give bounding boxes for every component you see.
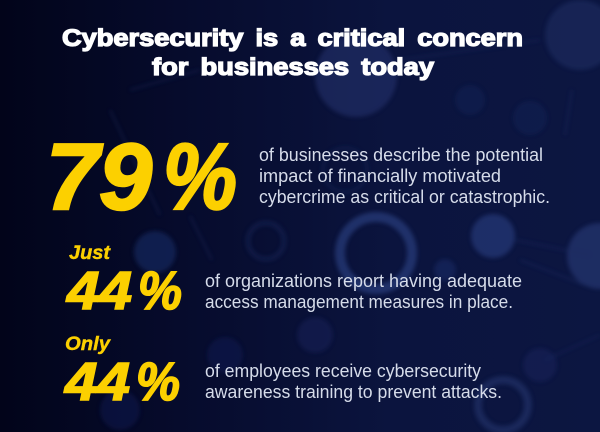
description: 79 percent: cybercrime as critical or catastrophic. [259, 187, 550, 207]
description: awareness training [205, 361, 502, 402]
title: Cybersecurity is a critical concern [62, 25, 523, 52]
big number 79%: 79 [46, 124, 152, 229]
big number 44%: 44 [64, 352, 130, 412]
stat: just 44 percent [66, 243, 522, 321]
description: access management [205, 271, 522, 312]
big number 79%: % [163, 124, 237, 229]
description: access management: of organizations report having adequate [205, 271, 522, 291]
label: Only: Only [65, 334, 112, 355]
title: for businesses today [152, 54, 435, 81]
title [62, 25, 523, 81]
big number 79% [46, 124, 237, 229]
description: access management: access management measures in place. [205, 292, 513, 312]
label: Just: Just [69, 243, 111, 264]
description: awareness training: awareness training to prevent attacks. [205, 382, 502, 402]
description: 79 percent [259, 145, 550, 207]
stat: only 44 percent [64, 334, 502, 412]
big number 44%: 44 [66, 261, 132, 321]
stat: 79 percent [46, 124, 550, 229]
description: 79 percent: impact of financially motivated [259, 166, 501, 186]
description: 79 percent: of businesses describe the potential [259, 145, 543, 165]
big number 44% [64, 352, 180, 412]
big number 44% [66, 261, 182, 321]
description: awareness training: of employees receive cybersecurity [205, 361, 481, 381]
big number 44%: % [138, 261, 182, 321]
big number 44%: % [136, 352, 180, 412]
